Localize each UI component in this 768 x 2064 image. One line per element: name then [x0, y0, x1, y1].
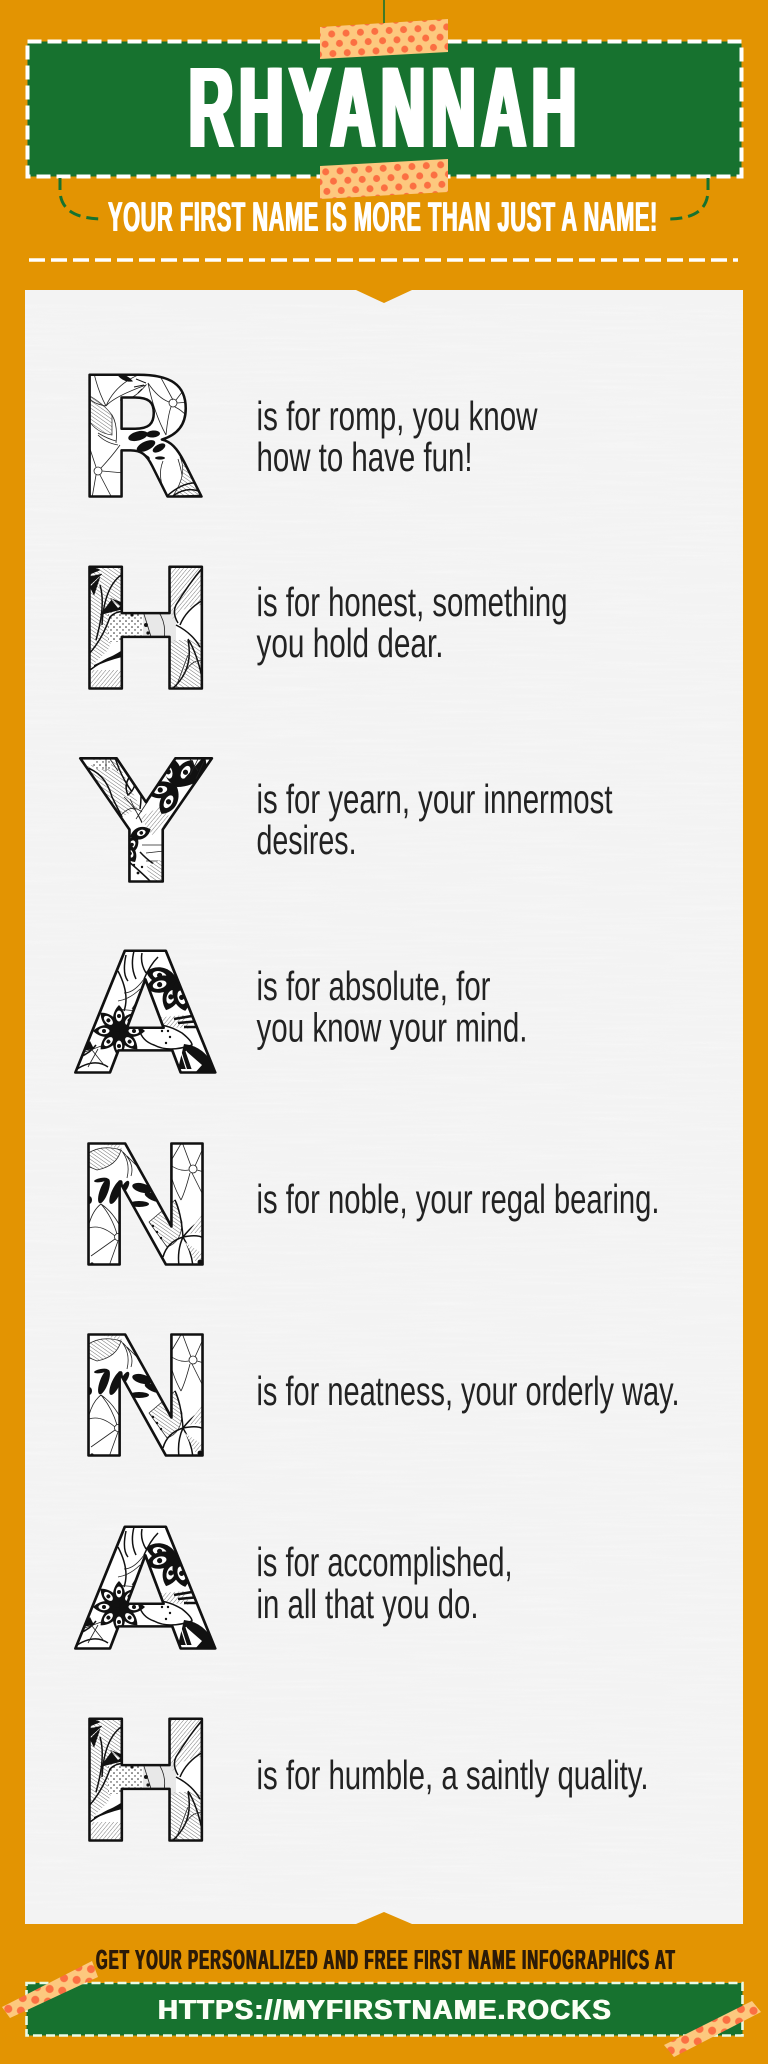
icon: patterned letter A repeated: A [74, 1494, 216, 1689]
row: R [74, 342, 538, 536]
row: H [74, 534, 567, 728]
row: second H [88, 1718, 646, 1842]
text: Y meaning [256, 776, 613, 863]
icon: patterned letter H: H [74, 534, 218, 728]
icon: patterned letter A repeated [74, 1526, 217, 1650]
text: Y meaning: desires. [256, 817, 356, 863]
text: H meaning [256, 579, 568, 666]
text: A meaning [256, 963, 528, 1050]
icon: patterned letter R [88, 374, 203, 498]
row: Y [75, 724, 613, 922]
text: A meaning: you know your mind. [256, 1004, 528, 1050]
text: R meaning: is for romp, you know [256, 393, 538, 439]
row: second A [69, 1494, 512, 1689]
icon: patterned letter Y: Y [80, 724, 212, 922]
icon: patterned letter A [74, 950, 217, 1074]
text: H meaning: is for honest, something [256, 579, 568, 625]
hanging thread [383, 0, 385, 24]
icon: patterned letter H repeated [88, 1718, 204, 1842]
text: second A meaning: is for accomplished, [256, 1539, 512, 1585]
footer call to action: GET YOUR PERSONALIZED AND FREE FIRST NAME INFOGRAPHICS AT [96, 1944, 675, 1974]
row: second N [72, 1302, 680, 1495]
icon: patterned letter R: R [74, 342, 205, 536]
row: N [72, 1111, 660, 1304]
icon: patterned letter A: A [74, 918, 216, 1113]
footer url: HTTPS://MYFIRSTNAME.ROCKS [158, 1994, 612, 2024]
title: RHYANNAH [189, 44, 582, 172]
text: R meaning [256, 393, 538, 480]
icon: patterned letter H repeated: H [74, 1686, 218, 1880]
text: H meaning: you hold dear. [256, 620, 444, 666]
footer banner [26, 1983, 742, 2036]
text: second A meaning: in all that you do. [256, 1581, 478, 1627]
title banner [28, 42, 742, 176]
text: R meaning: how to have fun! [256, 434, 472, 480]
icon: patterned letter N repeated: N [72, 1302, 219, 1495]
icon: patterned letter N: N [72, 1111, 219, 1304]
tape: bottom of banner [320, 159, 448, 199]
icon: patterned letter Y [78, 757, 214, 883]
panel: letters background [25, 290, 743, 1924]
text: Y meaning: is for yearn, your innermost [256, 776, 613, 822]
icon: patterned letter N repeated [87, 1333, 204, 1457]
tape: top [320, 19, 448, 59]
tape: footer right [664, 2001, 761, 2057]
subtitle: YOUR FIRST NAME IS MORE THAN JUST A NAME! [108, 192, 657, 240]
icon: patterned letter N [87, 1142, 204, 1266]
text: second A meaning [256, 1539, 512, 1627]
icon: patterned letter H [88, 566, 204, 690]
row: A [69, 918, 528, 1113]
connector: right [668, 178, 708, 219]
tape: footer left [2, 1961, 98, 2018]
text: A meaning: is for absolute, for [256, 963, 490, 1009]
connector: left [60, 178, 104, 219]
